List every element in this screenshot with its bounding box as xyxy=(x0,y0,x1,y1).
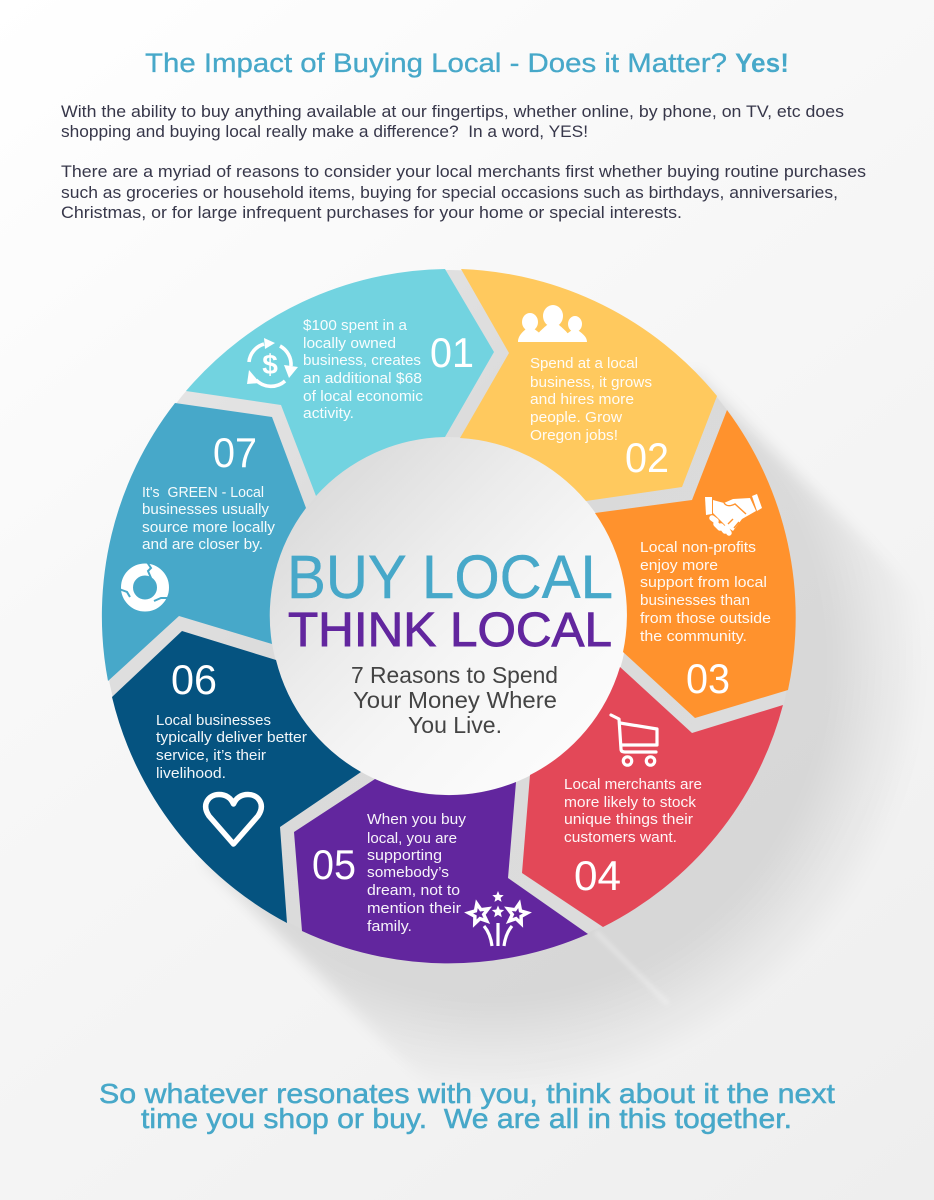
icon: fireworks xyxy=(462,891,534,946)
text: supporting xyxy=(367,848,442,864)
text: the community. xyxy=(640,629,747,645)
text: locally owned xyxy=(303,336,396,352)
text xyxy=(303,318,423,422)
text: enjoy more xyxy=(640,558,718,574)
closing message xyxy=(99,1078,835,1134)
text: Spend at a local xyxy=(530,356,638,372)
icon: people xyxy=(518,305,587,342)
number: 02 xyxy=(625,434,669,481)
panel: 03 non-profits xyxy=(595,410,796,718)
subheading xyxy=(351,662,558,738)
text: somebody’s xyxy=(367,865,449,881)
text: dream, not to xyxy=(367,883,460,899)
text: and hires more xyxy=(530,392,634,408)
ring base showing through the gaps xyxy=(103,270,795,962)
panel: 01 economic activity xyxy=(186,269,494,496)
text: It's GREEN - Local xyxy=(142,485,264,501)
text: businesses usually xyxy=(142,502,270,518)
icon: shopping cart xyxy=(611,715,657,765)
subheading: Your Money Where xyxy=(353,687,557,713)
number: 05 xyxy=(312,841,356,888)
number: 03 xyxy=(686,655,730,702)
text: business, creates xyxy=(303,353,421,369)
intro paragraph 2: such as groceries or household items, buying for special occasions such as birthdays, anniversaries, xyxy=(61,183,838,202)
closing message: So whatever resonates with you, think about it the next xyxy=(99,1078,835,1109)
text: mention their xyxy=(367,901,461,917)
text: Local merchants are xyxy=(564,777,702,793)
centre disc xyxy=(270,437,628,795)
text: support from local xyxy=(640,575,767,591)
text: business, it grows xyxy=(530,375,652,391)
text: source more locally xyxy=(142,520,276,536)
text: Local businesses xyxy=(156,713,271,729)
title: Yes! xyxy=(735,48,789,78)
intro paragraph 1: shopping and buying local really make a difference? In a word, YES! xyxy=(61,122,588,141)
panel: 04 unique stock xyxy=(522,667,783,927)
closing message: time you shop or buy. We are all in this together. xyxy=(141,1103,792,1134)
text xyxy=(564,777,702,846)
text: from those outside xyxy=(640,611,771,627)
long diagonal shadow of the ring xyxy=(204,371,934,1191)
light streak beneath segment tips xyxy=(596,932,668,1004)
number: 01 xyxy=(430,329,474,376)
text xyxy=(142,485,276,553)
centre heading xyxy=(287,543,613,738)
panel: 07 green xyxy=(102,403,306,681)
text: more likely to stock xyxy=(564,795,697,811)
text: activity. xyxy=(303,406,354,422)
icon: dollar cycle: $ xyxy=(262,349,278,380)
heading: buy local: BUY LOCAL xyxy=(287,543,613,611)
number: 04 xyxy=(574,852,621,899)
text xyxy=(156,713,307,782)
icon: handshake xyxy=(705,494,762,533)
text: livelihood. xyxy=(156,766,226,782)
text: local, you are xyxy=(367,831,457,847)
text: people. Grow xyxy=(530,410,622,426)
intro paragraph 2: There are a myriad of reasons to consider your local merchants first whether buying routine purchases xyxy=(61,162,866,181)
text: of local economic xyxy=(303,389,423,405)
intro paragraph 1 xyxy=(61,102,844,141)
title: The Impact of Buying Local - Does it Matter? xyxy=(145,48,727,78)
text: family. xyxy=(367,919,412,935)
intro paragraph 2: Christmas, or for large infrequent purchases for your home or special interests. xyxy=(61,203,682,222)
text: an additional $68 xyxy=(303,371,422,387)
text: businesses than xyxy=(640,593,750,609)
text: Local non-profits xyxy=(640,540,756,556)
text xyxy=(367,812,467,935)
panel: 06 better service xyxy=(112,631,361,923)
text xyxy=(640,540,771,645)
text: and are closer by. xyxy=(142,537,263,553)
subheading: 7 Reasons to Spend xyxy=(351,662,558,688)
text: service, it’s their xyxy=(156,748,266,764)
number: 06 xyxy=(171,656,217,703)
icon: recycle arrows xyxy=(119,562,170,606)
text: When you buy xyxy=(367,812,467,828)
text: Oregon jobs! xyxy=(530,428,618,444)
text: $100 spent in a xyxy=(303,318,408,334)
icon: dollar cycle xyxy=(247,338,298,386)
intro paragraph 1: With the ability to buy anything available at our fingertips, whether online, by phone, on TV, etc does xyxy=(61,102,844,121)
heading: think local: THINK LOCAL xyxy=(288,604,612,657)
text: customers want. xyxy=(564,830,677,846)
subheading: You Live. xyxy=(408,712,502,738)
intro paragraph 2 xyxy=(61,162,866,222)
number: 07 xyxy=(213,429,257,476)
icon: heart xyxy=(206,794,261,844)
panel: 05 supporting a dream xyxy=(294,779,588,963)
text: unique things their xyxy=(564,812,693,828)
text: typically deliver better xyxy=(156,730,307,746)
panel: 02 jobs xyxy=(460,269,717,501)
text xyxy=(530,356,652,444)
